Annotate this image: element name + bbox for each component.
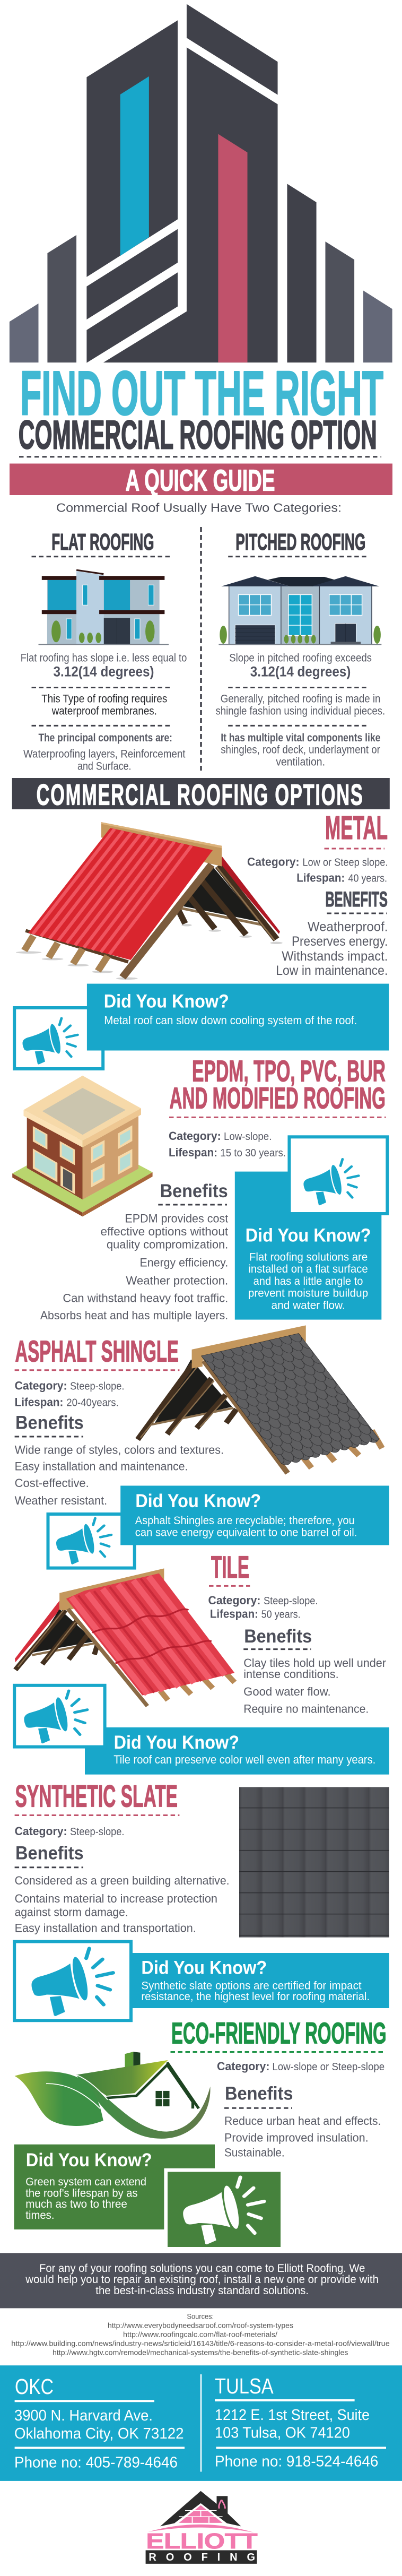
sources: http://www.roofingcalc.com/flat-roof-meterials/ xyxy=(123,2330,277,2338)
callout: slate did you know xyxy=(14,1941,389,2020)
location: tulsa: 1212 E. 1st Street, Suite xyxy=(215,2407,370,2424)
callout: epdm did you know: installed on a flat surface xyxy=(248,1263,368,1275)
flat roofing slope text: Flat roofing has slope i.e. less equal to xyxy=(21,652,187,664)
callout: eco did you know: Green system can extend xyxy=(25,2176,146,2188)
callout: asphalt did you know: Asphalt Shingles are recyclable; therefore, you xyxy=(135,1515,355,1527)
pitched roofing construction text: Generally, pitched roofing is made in xyxy=(221,693,380,705)
flat roofing components text xyxy=(23,732,186,772)
panel: flat roofing xyxy=(21,529,187,772)
callout: slate did you know: Did You Know? xyxy=(141,1957,267,1978)
flat roofing slope text xyxy=(21,652,187,679)
eco benefits list: Reduce urban heat and effects. xyxy=(224,2114,381,2128)
callout: eco did you know: the roof's lifespan by as xyxy=(25,2187,138,2199)
flat roofing components text: and Surface. xyxy=(77,760,132,772)
heading: tile benefits: Benefits xyxy=(244,1626,312,1647)
location: tulsa: Phone no: 918-524-4646 xyxy=(215,2453,378,2470)
illustration: pitched roof house xyxy=(219,576,381,644)
pitched roofing components text xyxy=(221,732,380,768)
section: asphalt shingle xyxy=(15,1325,389,1568)
eco benefits list: Provide improved insulation. xyxy=(224,2131,369,2144)
flat roofing components text: Waterproofing layers, Reinforcement xyxy=(23,748,186,760)
epdm category and lifespan xyxy=(169,1129,286,1159)
heading: synthetic slate: SYNTHETIC SLATE xyxy=(15,1779,178,1814)
callout: asphalt did you know xyxy=(48,1486,389,1568)
callout: slate did you know: resistance, the highest level for roofing material. xyxy=(141,1991,370,2003)
heading: eco benefits: Benefits xyxy=(225,2084,293,2104)
slate benefits list: Considered as a green building alternative. xyxy=(15,1874,230,1887)
tile benefits list: intense conditions. xyxy=(243,1667,339,1681)
callout: metal did you know xyxy=(14,984,389,1069)
asphalt category and lifespan: 20-40years. xyxy=(66,1397,119,1408)
icon: megaphone xyxy=(22,1018,77,1065)
epdm category and lifespan: Lifespan: xyxy=(169,1146,217,1159)
section: metal xyxy=(14,810,389,1069)
panel: pitched roofing xyxy=(216,529,385,768)
callout: eco did you know: times. xyxy=(25,2209,54,2221)
tile category and lifespan: Steep-slope. xyxy=(264,1595,318,1607)
tile category and lifespan xyxy=(208,1594,318,1621)
epdm category and lifespan: Low-slope. xyxy=(224,1131,272,1143)
asphalt category and lifespan: Lifespan: xyxy=(15,1396,63,1408)
sources xyxy=(11,2312,390,2357)
logo: elliott roofing: ELLIOTT xyxy=(146,2529,258,2553)
pitched roofing slope text xyxy=(229,652,372,679)
epdm benefits list xyxy=(40,1212,228,1322)
heading: flat roofing: FLAT ROOFING xyxy=(51,529,154,555)
location: tulsa: 103 Tulsa, OK 74120 xyxy=(215,2425,350,2442)
icon: megaphone xyxy=(56,1518,111,1564)
pitched roofing construction text: shingle fashion using individual pieces. xyxy=(216,705,385,717)
epdm benefits list: effective options without xyxy=(101,1225,228,1238)
heading: asphalt benefits: Benefits xyxy=(15,1412,84,1433)
metal category and lifespan: Lifespan: xyxy=(296,871,345,885)
illustration: green house and leaf xyxy=(15,2052,211,2139)
icon: megaphone xyxy=(24,1691,88,1743)
metal category and lifespan xyxy=(247,855,388,885)
epdm benefits list: Energy efficiency. xyxy=(140,1256,228,1269)
callout: eco did you know: much as two to three xyxy=(25,2198,127,2210)
asphalt category and lifespan: Category: xyxy=(15,1379,67,1393)
tile benefits list: Require no maintenance. xyxy=(243,1702,369,1716)
callout: tile did you know: Did You Know? xyxy=(114,1732,239,1753)
eco benefits list: Sustainable. xyxy=(224,2146,285,2159)
hero building illustration xyxy=(10,4,392,363)
callout: asphalt did you know: Did You Know? xyxy=(135,1491,261,1511)
pitched roofing slope text: 3.12(14 degrees) xyxy=(250,663,351,679)
illustration: metal roof xyxy=(16,822,283,980)
location: okc: Phone no: 405-789-4646 xyxy=(14,2454,178,2471)
callout: slate did you know: Synthetic slate options are certified for impact xyxy=(141,1979,362,1992)
location: tulsa: TULSA xyxy=(215,2374,274,2398)
heading: asphalt shingle: ASPHALT SHINGLE xyxy=(15,1334,179,1368)
epdm benefits list: Absorbs heat and has multiple layers. xyxy=(40,1309,228,1322)
sources: http://www.everybodyneedsaroof.com/roof-system-types xyxy=(108,2321,293,2329)
metal category and lifespan: 40 years. xyxy=(348,873,387,885)
pitched roofing slope text: Slope in pitched roofing exceeds xyxy=(229,652,372,664)
illustration: flat roof building xyxy=(12,1076,153,1216)
section: synthetic slate xyxy=(14,1779,389,2020)
sources: http://www.building.com/news/industry-news/srticleid/16143/title/6-reasons-to-consider-a-metal-roof/viewall/true xyxy=(11,2339,390,2347)
asphalt category and lifespan xyxy=(15,1379,124,1408)
tile category and lifespan: 50 years. xyxy=(261,1609,301,1621)
callout: metal did you know: Did You Know? xyxy=(104,991,229,1012)
footer: contact locations xyxy=(0,2365,402,2481)
heading: slate benefits: Benefits xyxy=(15,1843,84,1864)
icon: megaphone xyxy=(303,1159,359,1205)
epdm category and lifespan: Category: xyxy=(169,1129,221,1143)
illustration: slate texture xyxy=(239,1787,389,1938)
heading: epdm, tpo, pvc, bur and modified roofing xyxy=(170,1054,386,1116)
icon: megaphone xyxy=(183,2177,264,2244)
heading: tile: TILE xyxy=(211,1550,249,1585)
metal benefits list: Preserves energy. xyxy=(292,934,388,949)
asphalt benefits list: Weather resistant. xyxy=(15,1494,107,1507)
location: okc: 3900 N. Harvard Ave. xyxy=(14,2407,153,2424)
slate benefits list xyxy=(15,1874,230,1935)
section: epdm xyxy=(12,1054,387,1322)
closing message band: For any of your roofing solutions you can come to Elliott Roofing. We xyxy=(39,2262,365,2275)
tile benefits list xyxy=(243,1656,386,1716)
eco category xyxy=(217,2060,384,2073)
flat roofing membrane text: waterproof membranes. xyxy=(51,705,157,717)
callout: asphalt did you know: can save energy equivalent to one barrel of oil. xyxy=(135,1527,357,1539)
flat roofing membrane text xyxy=(41,693,167,717)
slate category xyxy=(15,1825,124,1838)
metal benefits list: Weatherproof. xyxy=(308,919,388,934)
tile category and lifespan: Lifespan: xyxy=(210,1607,258,1621)
asphalt benefits list: Cost-effective. xyxy=(15,1476,89,1490)
epdm benefits list: Weather protection. xyxy=(126,1274,228,1287)
callout: epdm did you know xyxy=(235,1137,387,1320)
banner: a quick guide xyxy=(10,464,392,498)
eco category: Category: xyxy=(217,2060,269,2073)
callout: epdm did you know: and water flow. xyxy=(272,1299,345,1312)
flat roofing components text: The principal components are: xyxy=(38,732,172,744)
section: eco-friendly roofing xyxy=(14,2017,387,2247)
slate benefits list: against storm damage. xyxy=(15,1905,128,1918)
heading: epdm benefits: Benefits xyxy=(160,1181,228,1201)
metal benefits list: Low in maintenance. xyxy=(276,963,388,978)
location: okc xyxy=(14,2374,185,2471)
tile benefits list: Clay tiles hold up well under xyxy=(243,1656,386,1670)
sources: http://www.hgtv.com/remodel/mechanical-systems/the-benefits-of-synthetic-slate-shingles xyxy=(53,2349,348,2357)
flat roofing membrane text: This Type of roofing requires xyxy=(41,693,167,705)
eco category: Low-slope or Steep-slope xyxy=(272,2061,384,2073)
slate category: Steep-slope. xyxy=(70,1826,124,1838)
illustration: asphalt shingle roof xyxy=(138,1325,382,1473)
callout: eco did you know: Did You Know? xyxy=(26,2150,152,2171)
closing message band: the best-in-class industry standard solutions. xyxy=(95,2285,309,2297)
pitched roofing components text: ventilation. xyxy=(276,756,325,768)
asphalt benefits list: Easy installation and maintenance. xyxy=(15,1459,188,1473)
pitched roofing construction text xyxy=(216,693,385,717)
tile category and lifespan: Category: xyxy=(208,1594,261,1607)
intro text: Commercial Roof Usually Have Two Categories: xyxy=(56,500,342,514)
metal category and lifespan: Low or Steep slope. xyxy=(302,857,388,869)
metal category and lifespan: Category: xyxy=(247,855,300,869)
location: okc: OKC xyxy=(15,2374,54,2399)
asphalt benefits list xyxy=(15,1443,224,1507)
epdm benefits list: Can withstand heavy foot traffic. xyxy=(63,1292,228,1305)
slate category: Category: xyxy=(15,1825,67,1838)
illustration: flat roof house xyxy=(39,570,169,644)
callout: metal did you know: Metal roof can slow down cooling system of the roof. xyxy=(104,1014,357,1027)
callout: tile did you know xyxy=(14,1685,389,1775)
callout: epdm did you know: and has a little angle to xyxy=(254,1275,363,1287)
pitched roofing components text: shingles, roof deck, underlayment or xyxy=(221,744,380,756)
epdm benefits list: EPDM provides cost xyxy=(125,1212,228,1225)
section: tile xyxy=(14,1550,389,1775)
logo: elliott roofing: ROOFING xyxy=(148,2552,255,2563)
flat roofing slope text: 3.12(14 degrees) xyxy=(53,663,154,679)
callout: epdm did you know: prevent moisture buildup xyxy=(248,1287,368,1300)
closing message band xyxy=(0,2253,402,2308)
metal benefits list xyxy=(276,919,388,978)
tile benefits list: Good water flow. xyxy=(243,1685,331,1698)
location: okc: Oklahoma City, OK 73122 xyxy=(14,2425,183,2442)
callout: eco did you know xyxy=(14,2145,281,2247)
banner: a quick guide: A QUICK GUIDE xyxy=(125,464,275,498)
illustration: tile roof xyxy=(15,1568,234,1706)
closing message band: would help you to repair an existing roof, install a new one or provide with xyxy=(25,2274,379,2286)
callout: epdm did you know: Did You Know? xyxy=(246,1225,371,1246)
asphalt benefits list: Wide range of styles, colors and textures. xyxy=(15,1443,224,1456)
epdm benefits list: quality compromization. xyxy=(107,1238,228,1251)
epdm category and lifespan: 15 to 30 years. xyxy=(220,1147,286,1159)
location: tulsa xyxy=(215,2374,386,2470)
metal benefits list: Withstands impact. xyxy=(282,949,388,964)
slate benefits list: Contains material to increase protection xyxy=(15,1892,217,1905)
eco benefits list xyxy=(224,2114,381,2159)
logo: elliott roofing xyxy=(146,2491,258,2564)
callout: tile did you know: Tile roof can preserve color well even after many years. xyxy=(113,1753,375,1766)
callout: epdm did you know: Flat roofing solutions are xyxy=(249,1251,368,1263)
slate benefits list: Easy installation and transportation. xyxy=(15,1922,196,1935)
icon: megaphone xyxy=(32,1949,113,2016)
sources: Sources: xyxy=(187,2312,214,2320)
asphalt category and lifespan: Steep-slope. xyxy=(70,1381,124,1393)
